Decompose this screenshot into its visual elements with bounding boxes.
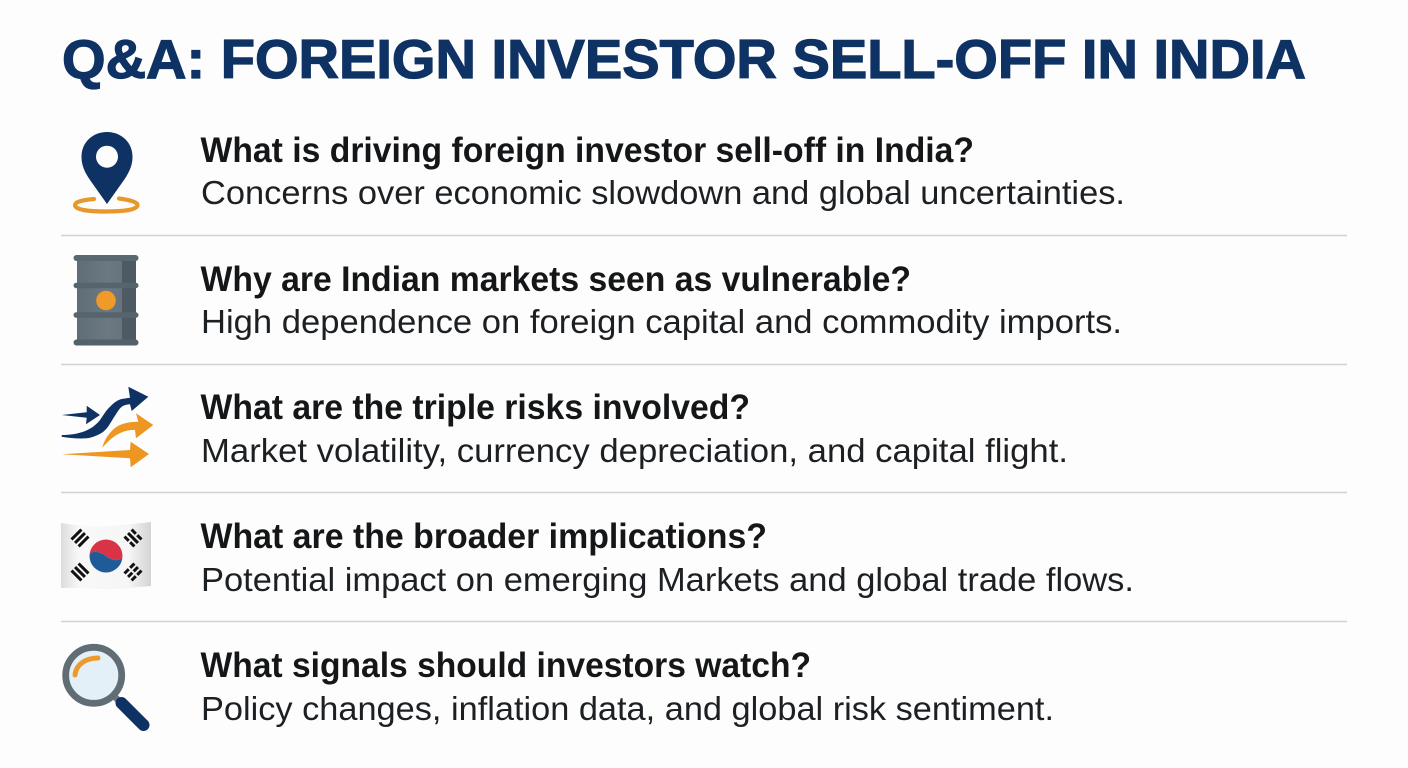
icon: magnifying glass [66, 647, 144, 725]
panel: signals to watch [66, 646, 1054, 728]
icon: flow arrows [62, 387, 153, 467]
question 4: What are the broader implications? [200, 517, 767, 556]
panel: what is driving the sell-off [75, 131, 1125, 212]
panel: triple risks [62, 387, 1068, 470]
title: Q&A: FOREIGN INVESTOR SELL-OFF IN INDIA [62, 28, 1306, 90]
question 2: Why are Indian markets seen as vulnerable? [200, 260, 911, 299]
answer 2: High dependence on foreign capital and commodity imports. [201, 304, 1122, 341]
answer 3: Market volatility, currency depreciation, and capital flight. [201, 433, 1068, 470]
question 5: What signals should investors watch? [200, 646, 811, 685]
answer 4: Potential impact on emerging Markets and global trade flows. [201, 562, 1134, 599]
icon: oil barrel [74, 255, 138, 346]
question 3: What are the triple risks involved? [200, 388, 750, 427]
answer 5: Policy changes, inflation data, and global risk sentiment. [201, 691, 1054, 728]
icon: location pin [75, 132, 138, 212]
icon: South Korean flag [61, 522, 151, 589]
answer 1: Concerns over economic slowdown and global uncertainties. [201, 175, 1125, 212]
question 1: What is driving foreign investor sell-off in India? [200, 131, 974, 170]
panel: why markets are vulnerable [74, 255, 1122, 346]
panel: broader implications [61, 517, 1134, 599]
